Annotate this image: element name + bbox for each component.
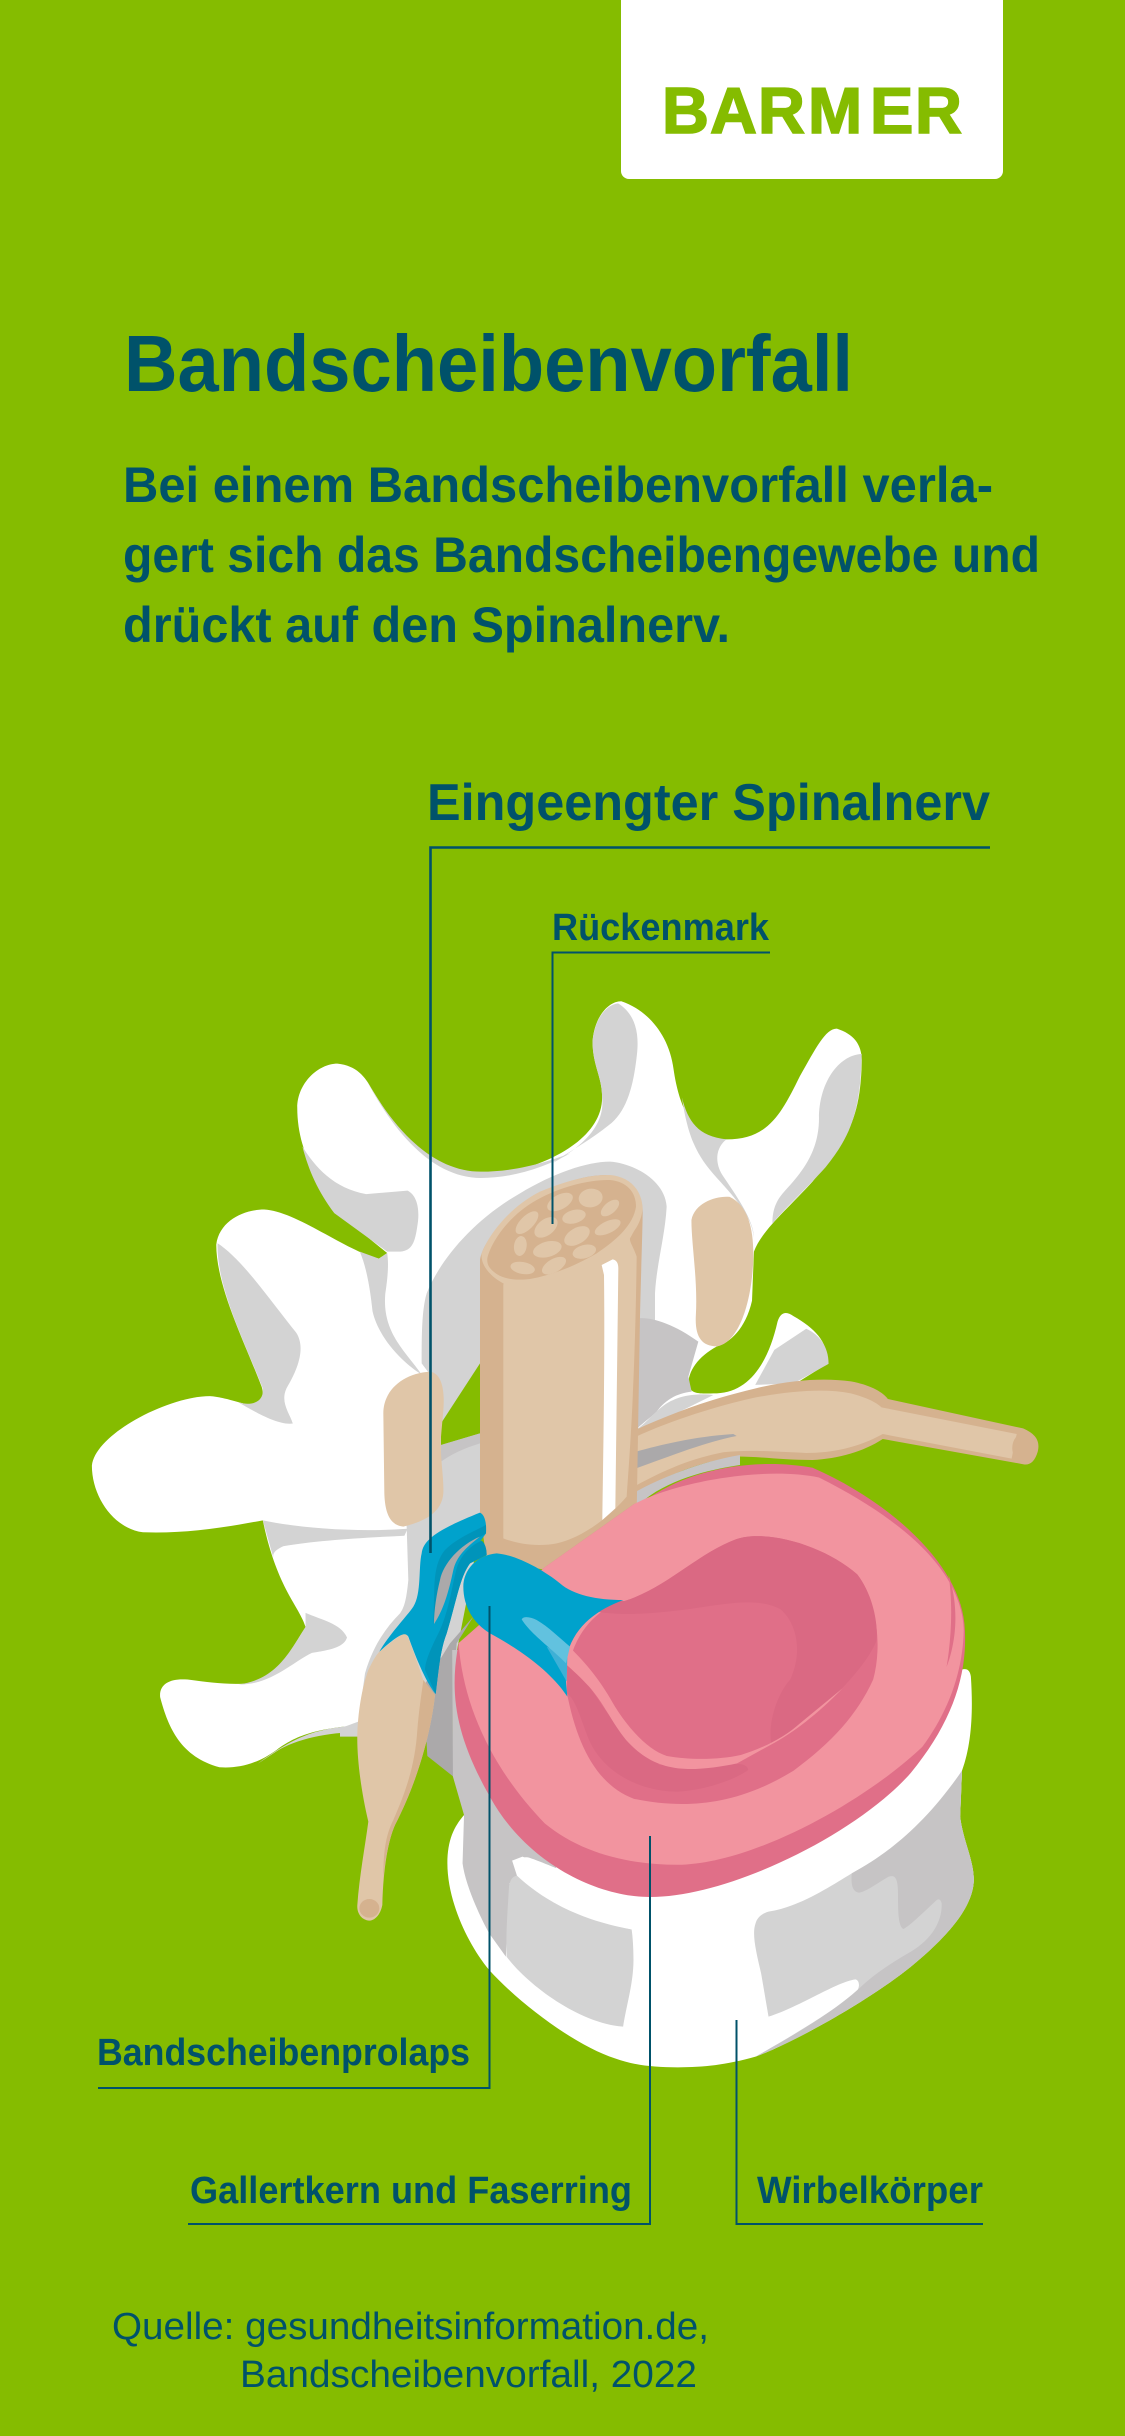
compressed nerve: blue <box>379 1513 487 1694</box>
vertebra arch <box>92 1001 862 1767</box>
label: Wirbelkörper: Wirbelkörper <box>757 2170 983 2212</box>
spine illustration <box>92 1001 1038 2067</box>
intro text <box>123 457 1040 653</box>
label: Bandscheibenprolaps: Bandscheibenprolaps <box>97 2032 470 2074</box>
vertebral body <box>447 1650 974 2067</box>
annulus outer edge <box>455 1464 965 1897</box>
compressed spinal nerve root, tan part <box>357 1633 435 1921</box>
source: Bandscheibenvorfall, 2022 <box>240 2354 697 2396</box>
vertebral canal shading <box>407 1162 713 1527</box>
logo: BARMER: BARMER <box>662 74 962 147</box>
nucleus <box>567 1536 878 1804</box>
annulus fibrosus <box>459 1474 964 1865</box>
leader: Wirbelkoerper <box>736 2020 983 2224</box>
source <box>112 2306 709 2396</box>
intervertebral disc <box>455 1464 965 1897</box>
disc herniation <box>463 1553 623 1697</box>
source: Quelle: gesundheitsinformation.de, <box>112 2306 709 2348</box>
logo: BARMER <box>621 0 1003 179</box>
label: Eingeengter Spinalnerv: Eingeengter Spinalnerv <box>427 774 990 832</box>
intro text: drückt auf den Spinalnerv. <box>123 597 730 653</box>
label: Rückenmark: Rückenmark <box>552 907 770 949</box>
label: Gallertkern und Faserring: Gallertkern und Faserring <box>190 2170 632 2212</box>
title: Bandscheibenvorfall <box>124 319 853 408</box>
leader: Rueckenmark <box>552 952 770 1224</box>
nucleus lower crescent and light stripe <box>565 1650 843 1792</box>
lower shading strip <box>340 1500 480 1777</box>
leader: Bandscheibenprolaps <box>98 1606 490 2088</box>
left facet <box>383 1372 444 1527</box>
spinal cord <box>480 1175 643 1570</box>
leader: Eingeengter Spinalnerv <box>430 848 990 1553</box>
prolapse <box>379 1513 623 1697</box>
right facet <box>691 1197 753 1346</box>
intro text: gert sich das Bandscheibengewebe und <box>123 527 1040 583</box>
facet joints <box>383 1197 753 1527</box>
leader: Gallertkern und Faserring <box>188 1836 650 2224</box>
intro text: Bei einem Bandscheibenvorfall verla- <box>123 457 993 513</box>
nerve root, right <box>634 1380 1038 1503</box>
